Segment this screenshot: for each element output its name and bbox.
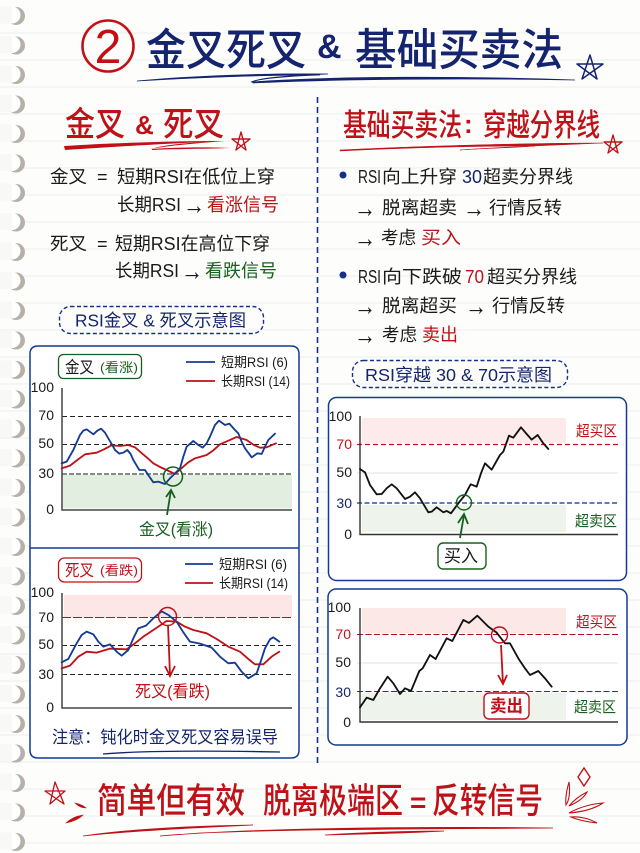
gridlines xyxy=(62,646,293,674)
heading: : xyxy=(464,109,473,139)
icon: red star xyxy=(604,135,622,153)
panel frame xyxy=(328,589,627,745)
icon: star left xyxy=(45,782,65,804)
axis labels: 100 xyxy=(31,584,54,600)
red long line xyxy=(62,437,276,474)
axis labels: 50 xyxy=(38,435,54,451)
RSI line xyxy=(360,616,552,707)
bullet: RSI crosses above 30: 脱离超卖 xyxy=(382,198,457,218)
bullet: RSI crosses above 30: 买入 xyxy=(421,228,461,248)
zone labels: 超卖区 xyxy=(575,513,617,530)
heading: 金叉 & 死叉: & xyxy=(135,110,154,140)
legend: 短期RSI (6) xyxy=(221,355,288,370)
chart: sell signal xyxy=(328,589,627,745)
label: RSI cross diagram xyxy=(60,306,264,334)
callout: 死叉(看跌) xyxy=(135,682,210,701)
bullet: RSI falls below 70: 超买分界线 xyxy=(487,267,577,287)
axis labels: 30 xyxy=(336,495,352,511)
axis labels: 100 xyxy=(329,408,352,424)
bullet: RSI falls below 70: RSI xyxy=(358,267,381,287)
title underline xyxy=(137,74,575,83)
axis labels: 30 xyxy=(38,465,54,481)
oversold band xyxy=(362,693,566,720)
green arrow xyxy=(166,490,175,515)
panel: basic trading method xyxy=(328,100,627,745)
cross marker xyxy=(164,467,182,486)
axis labels xyxy=(328,599,351,730)
axis labels: 50 xyxy=(335,654,351,670)
bullet: RSI falls below 70: → xyxy=(354,320,376,350)
bullet: RSI falls below 70: → xyxy=(354,291,376,321)
axis labels: 0 xyxy=(343,714,351,730)
legend: 短期RSI (6) xyxy=(219,557,287,572)
axis labels: 70 xyxy=(38,609,54,625)
axis labels: 100 xyxy=(328,599,351,615)
bullet: RSI falls below 70: 向下跌破 xyxy=(382,267,462,287)
bullet: RSI crosses above 30: → xyxy=(463,193,485,223)
bullet: RSI crosses above 30: → xyxy=(354,193,376,223)
bullet: RSI falls below 70: 卖出 xyxy=(422,325,458,345)
red long line xyxy=(62,621,279,668)
blue short line xyxy=(62,421,275,484)
overbought band xyxy=(64,595,292,617)
green arrow xyxy=(458,514,468,538)
bullet: RSI crosses above 30: 超卖分界线 xyxy=(483,167,573,187)
tag: death cross bearish: 死叉 xyxy=(65,562,94,580)
tag: golden cross bullish: (看涨) xyxy=(100,360,138,375)
bullet: RSI crosses above 30 xyxy=(340,167,573,253)
bullet: RSI crosses above 30: 向上升穿 xyxy=(382,167,457,187)
legend: 长期RSI (14) xyxy=(219,576,288,591)
golden cross definition xyxy=(50,167,279,220)
zone labels xyxy=(575,423,617,530)
death cross definition: → xyxy=(181,256,203,286)
title text: 基础买卖法 xyxy=(355,14,563,78)
title text: 金叉死叉 xyxy=(146,14,306,78)
footer text: 反转信号 xyxy=(432,773,543,824)
title xyxy=(82,14,603,83)
callout: buy: 买入 xyxy=(444,546,478,566)
golden cross definition: 长期RSI xyxy=(117,195,181,215)
callout: 金叉(看涨) xyxy=(139,520,213,539)
icon: diamond sparkle xyxy=(578,768,590,786)
center divider xyxy=(316,97,318,764)
golden cross definition: → xyxy=(183,190,205,220)
death cross definition xyxy=(50,234,277,286)
axis labels xyxy=(31,584,54,715)
callout: sell xyxy=(484,693,529,719)
icon: sparkle marks left xyxy=(66,803,86,823)
tag: death cross bearish: (看跌) xyxy=(100,563,138,578)
label: crossing diagram xyxy=(352,360,568,388)
legend xyxy=(186,355,290,389)
tag: death cross bearish xyxy=(58,558,142,582)
legend: 长期RSI (14) xyxy=(221,374,290,389)
gridlines xyxy=(357,472,618,474)
icon: red star xyxy=(232,132,250,150)
icon: circled number 2: 2 xyxy=(95,21,121,74)
note: 注意：钝化时金叉死叉容易误导 xyxy=(52,728,278,747)
legend xyxy=(185,557,288,591)
heading underline xyxy=(64,141,231,150)
cross marker xyxy=(158,608,176,626)
oversold band xyxy=(362,505,566,532)
axis labels: 0 xyxy=(46,501,54,517)
death cross definition: = xyxy=(97,234,108,254)
zone labels: 超买区 xyxy=(576,614,617,631)
callout: buy xyxy=(438,543,486,569)
axes xyxy=(62,593,292,708)
bullet: RSI falls below 70: 行情反转 xyxy=(492,296,565,316)
title text xyxy=(146,14,563,78)
footer text: 简单但有效 xyxy=(97,773,245,824)
footer text: = xyxy=(410,787,426,818)
footer banner xyxy=(45,768,603,836)
zone labels: 超卖区 xyxy=(574,699,616,716)
red arrow xyxy=(498,645,507,684)
bullet: RSI falls below 70: → xyxy=(465,291,487,321)
heading: 基础买卖法 xyxy=(343,100,462,145)
bullet: RSI falls below 70 xyxy=(340,267,577,350)
axis labels: 50 xyxy=(336,464,352,480)
death cross definition: 看跌信号 xyxy=(205,261,277,281)
RSI line xyxy=(360,427,548,513)
tag: golden cross bullish xyxy=(58,354,142,378)
axis labels: 70 xyxy=(336,436,352,452)
axis labels: 50 xyxy=(38,636,54,652)
panel frame xyxy=(30,346,299,758)
heading: 金叉 & 死叉: 死叉 xyxy=(163,97,224,146)
title text: & xyxy=(317,28,342,66)
bullet: RSI crosses above 30: 30 xyxy=(462,167,482,187)
axis labels: 0 xyxy=(344,526,352,542)
overbought band xyxy=(362,608,566,633)
overbought band xyxy=(362,418,566,443)
golden cross definition: = xyxy=(97,167,108,187)
chart: buy signal xyxy=(328,398,626,580)
axes xyxy=(360,608,618,722)
heading: 金叉 & 死叉: 金叉 xyxy=(65,97,125,146)
blue short line xyxy=(62,611,279,678)
golden cross definition: 看涨信号 xyxy=(207,195,279,215)
panel: golden and death cross text xyxy=(50,97,279,334)
footer underline xyxy=(83,825,553,836)
heading xyxy=(343,100,600,145)
axes xyxy=(360,416,618,534)
bullet: RSI crosses above 30: RSI xyxy=(358,167,381,187)
axis labels xyxy=(31,379,54,517)
bullet: RSI crosses above 30: 考虑 xyxy=(381,228,416,248)
bullet: RSI crosses above 30: 行情反转 xyxy=(489,198,562,218)
chart: death cross xyxy=(31,557,293,715)
heading: 穿越分界线 xyxy=(483,100,600,145)
icon: circled number 2 xyxy=(82,20,134,74)
golden cross definition: 短期RSI在低位上穿 xyxy=(117,167,275,187)
binder holes xyxy=(0,6,25,851)
panel frame xyxy=(328,398,626,580)
tag: golden cross bullish: 金叉 xyxy=(65,358,94,377)
axis labels: 70 xyxy=(38,407,54,423)
icon: burst marks right xyxy=(566,782,603,823)
panel: left charts xyxy=(30,346,299,758)
bullet: RSI falls below 70: 70 xyxy=(465,267,484,287)
bullet: RSI falls below 70: 考虑 xyxy=(382,325,417,345)
gridlines xyxy=(62,416,293,444)
gridlines xyxy=(357,662,618,664)
death cross definition: 短期RSI在高位下穿 xyxy=(115,234,270,254)
zone labels: 超买区 xyxy=(576,423,617,440)
callout: sell: 卖出 xyxy=(490,696,523,716)
bullet: RSI crosses above 30: → xyxy=(354,223,376,253)
cross marker xyxy=(456,495,472,510)
axis labels: 30 xyxy=(335,684,351,700)
axes xyxy=(62,388,292,510)
axis labels: 70 xyxy=(335,626,351,642)
label: crossing diagram: RSI穿越 30 & 70示意图 xyxy=(365,365,552,385)
death cross definition: 死叉 xyxy=(50,234,87,254)
icon: star xyxy=(577,55,603,79)
footer text: 脱离极端区 xyxy=(263,773,403,824)
death cross definition: 长期RSI xyxy=(115,261,179,281)
footer text xyxy=(97,773,543,824)
bullet: RSI falls below 70: 脱离超买 xyxy=(382,296,457,316)
oversold band xyxy=(63,475,292,508)
heading: 金叉 & 死叉 xyxy=(65,97,224,146)
axis labels xyxy=(329,408,352,542)
axis labels: 100 xyxy=(31,379,54,395)
heading underline xyxy=(340,143,603,151)
zone labels xyxy=(574,614,617,716)
label: RSI cross diagram: RSI金叉 & 死叉示意图 xyxy=(75,310,246,330)
red arrow xyxy=(165,625,175,676)
axis labels: 30 xyxy=(38,666,54,682)
cross marker xyxy=(492,627,508,643)
golden cross definition: 金叉 xyxy=(50,167,87,187)
axis labels: 0 xyxy=(46,699,54,715)
chart: golden cross xyxy=(31,354,293,539)
